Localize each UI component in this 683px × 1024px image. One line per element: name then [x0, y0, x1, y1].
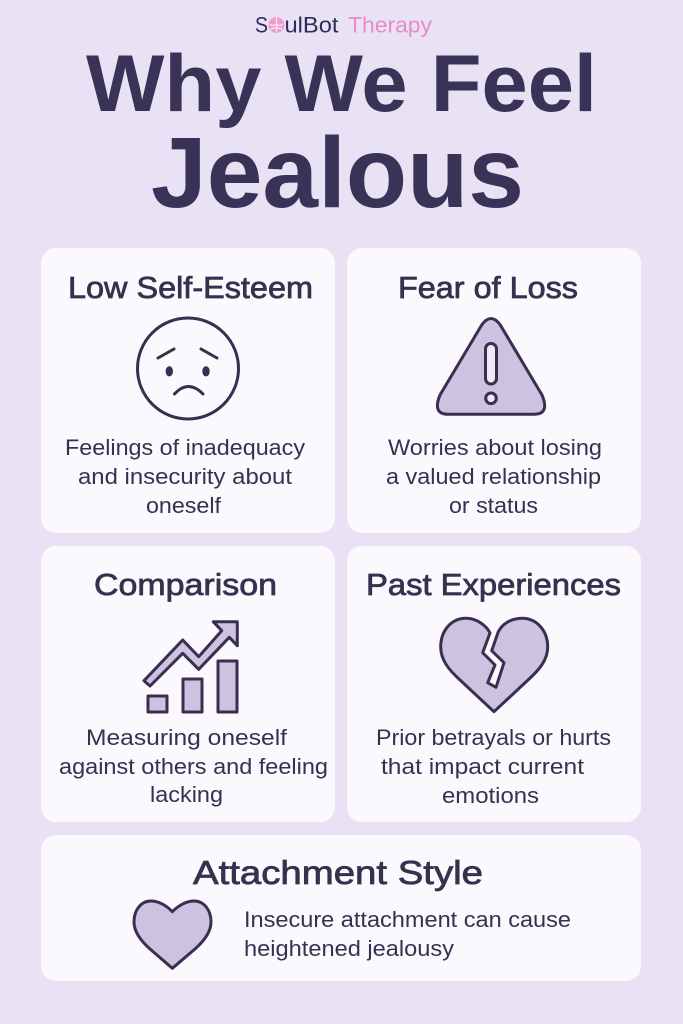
logo: SoulBot Therapy: ulBot [284, 12, 338, 38]
text: past experiences description: emotions [442, 783, 539, 808]
icon: bar chart with rising arrow [144, 622, 237, 712]
heading: past experiences: Past Experiences [366, 567, 621, 602]
text: comparison description: against others and feeling [59, 754, 328, 779]
text: attachment style description: heightened jealousy [244, 936, 455, 961]
text: fear of loss description: a valued relationship [386, 464, 601, 489]
text: attachment style description [244, 907, 571, 961]
icon: heart [134, 901, 211, 968]
text: fear of loss description: or status [449, 493, 538, 518]
title: Why We Feel [86, 39, 597, 129]
text: low self-esteem description [65, 435, 306, 518]
heading: fear of loss: Fear of Loss [398, 270, 578, 305]
logo: SoulBot Therapy [255, 12, 432, 38]
title: Jealous [151, 117, 524, 229]
heading: comparison: Comparison [94, 567, 277, 602]
text: past experiences description [376, 725, 611, 808]
panel: attachment style [41, 835, 641, 981]
logo: SoulBot Therapy: S [255, 12, 268, 38]
text: fear of loss description [386, 435, 602, 518]
icon: warning triangle [437, 318, 545, 414]
text: comparison description: lacking [150, 782, 223, 807]
icon: pink brain [268, 17, 284, 33]
panel: low self-esteem [41, 248, 335, 533]
panel: past experiences [347, 546, 641, 822]
text: past experiences description: Prior betrayals or hurts [376, 725, 611, 750]
logo: SoulBot Therapy: Therapy [348, 12, 432, 38]
panel: comparison [41, 546, 335, 822]
icon: sad face [138, 318, 238, 419]
icon: broken heart [441, 618, 548, 712]
text: past experiences description: that impact current [381, 754, 585, 779]
text: low self-esteem description: oneself [146, 493, 222, 518]
title [86, 39, 597, 229]
heading: attachment style: Attachment Style [193, 854, 483, 891]
text: attachment style description: Insecure attachment can cause [244, 907, 571, 932]
text: comparison description: Measuring oneself [86, 725, 288, 750]
panel: fear of loss [347, 248, 641, 533]
text: low self-esteem description: Feelings of inadequacy [65, 435, 306, 460]
text: low self-esteem description: and insecurity about [78, 464, 293, 489]
text: comparison description [59, 725, 328, 807]
heading: low self-esteem: Low Self-Esteem [68, 270, 313, 305]
text: fear of loss description: Worries about losing [388, 435, 602, 460]
